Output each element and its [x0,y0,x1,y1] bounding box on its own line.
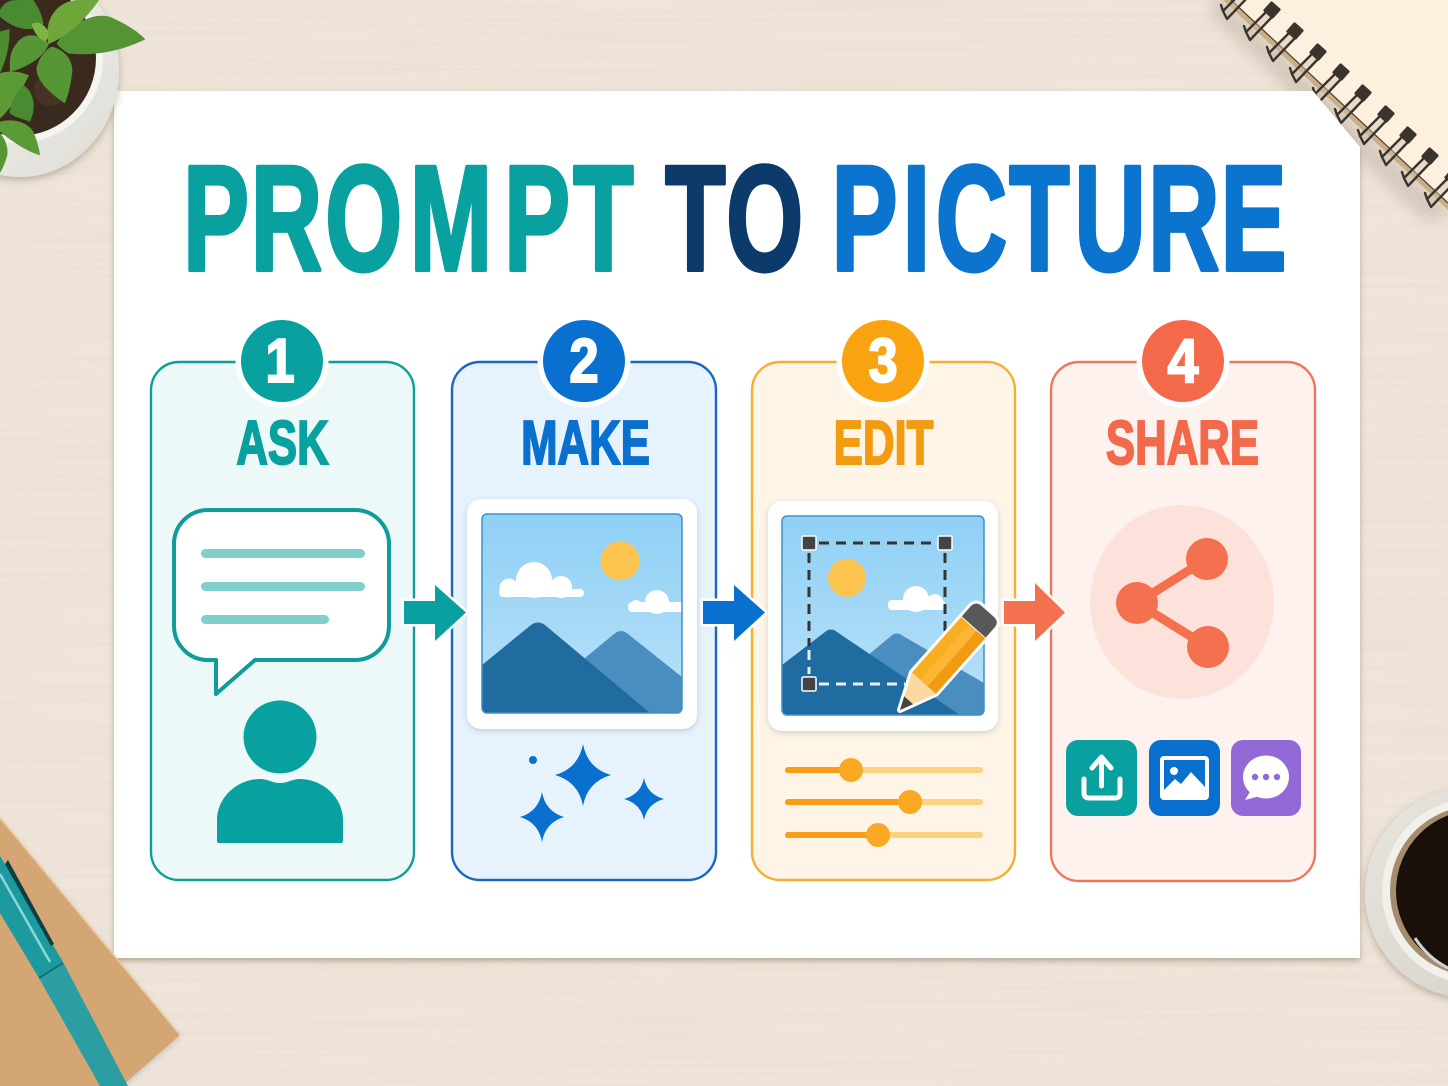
coffee cup [1365,788,1448,998]
kraft notebook [0,818,180,1086]
title: PICTURE [832,134,1287,302]
panel: edit [752,314,1015,880]
panel: share [1051,314,1315,881]
heading: edit: EDIT [834,408,933,478]
icon: gallery [1149,740,1220,816]
step badge 2 [538,314,630,408]
white paper sheet [114,91,1360,958]
heading: share: SHARE [1106,408,1259,478]
panel: make [452,314,716,880]
arrow: edit to share [1004,583,1065,641]
heading: ask: ASK [236,408,329,478]
step badge 1: 1 [265,327,295,396]
icon: share [1090,505,1274,699]
spiral notebook [1210,0,1448,222]
step badge 3 [836,314,930,408]
title [183,134,1287,302]
heading: make: MAKE [521,408,650,478]
image card with selection [768,501,998,731]
title: PROMPT [183,134,634,302]
adjustment sliders [785,758,983,847]
icon: upload [1066,740,1137,816]
icon: chat [1231,740,1301,816]
step badge 3: 3 [868,327,898,396]
title: TO [665,134,803,302]
step badge 2: 2 [569,327,599,396]
step badge 4 [1136,314,1230,408]
arrow: ask to make [404,585,466,641]
icon: person [217,700,343,843]
panel: ask [151,314,414,880]
icon: speech bubble [174,510,389,694]
plant in white pot [0,0,145,177]
step badge 4: 4 [1167,327,1199,396]
icon: sparkles [520,744,664,842]
step badge 1 [236,314,328,408]
arrow: make to edit [703,585,765,641]
image card [467,499,697,729]
teal pen [0,856,128,1086]
icon: pencil [888,601,1000,721]
